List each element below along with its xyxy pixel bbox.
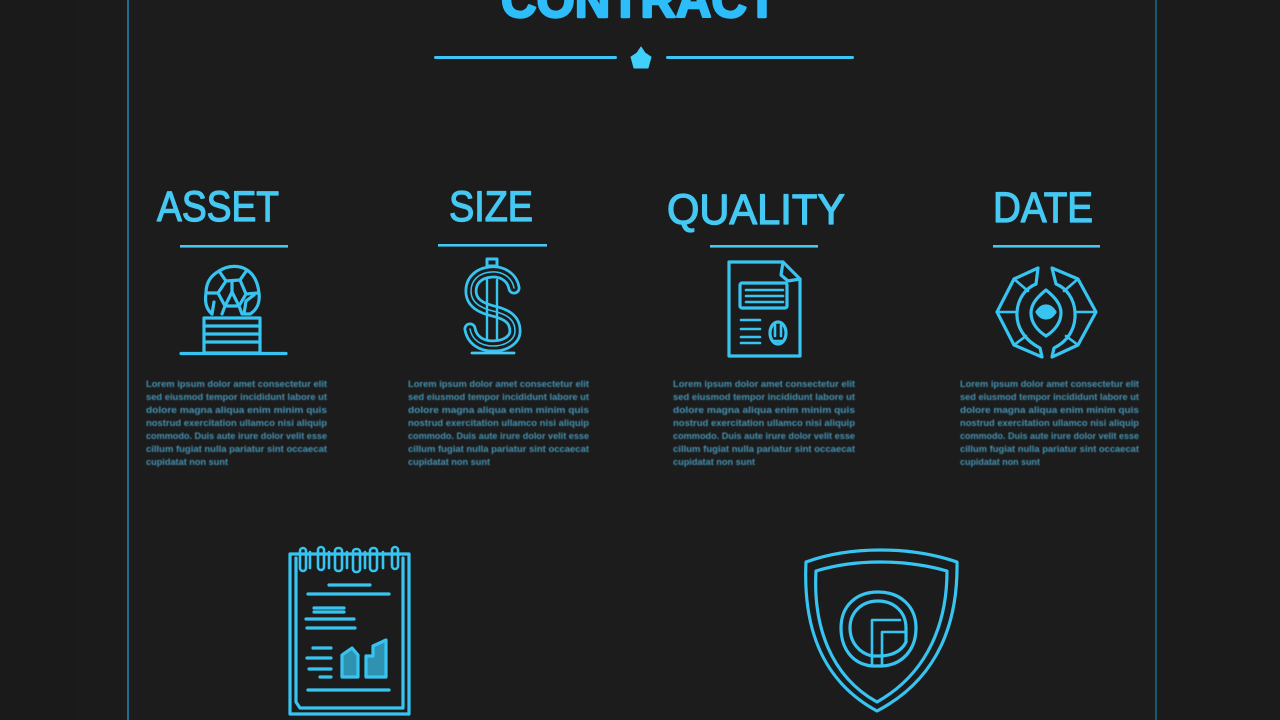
body text: size: sed eiusmod tempor incididunt labore ut — [408, 392, 589, 402]
body text: date: cupidatat non sunt — [960, 457, 1040, 467]
body text: quality: dolore magna aliqua enim minim quis — [673, 405, 855, 415]
body text: asset — [146, 379, 328, 467]
heading: size: SIZE — [449, 183, 533, 231]
icon: dollar sign — [470, 259, 515, 353]
body text: asset: sed eiusmod tempor incididunt labore ut — [146, 392, 327, 402]
body text: quality: cillum fugiat nulla pariatur sint occaecat — [673, 444, 855, 454]
icon: shield with emblem — [806, 550, 957, 711]
body text: quality: Lorem ipsum dolor amet consectetur elit — [673, 379, 855, 389]
body text: date — [960, 379, 1140, 467]
panel: asset — [146, 183, 328, 467]
icon: date cycle emblem — [997, 268, 1096, 357]
body text: quality — [673, 379, 856, 467]
body text: quality: nostrud exercitation ullamco nisi aliquip — [673, 418, 856, 428]
panel: date — [960, 184, 1140, 467]
body text: size: nostrud exercitation ullamco nisi aliquip — [408, 418, 590, 428]
body text: asset: dolore magna aliqua enim minim quis — [146, 405, 327, 415]
body text: quality: sed eiusmod tempor incididunt labore ut — [673, 392, 855, 402]
body text: size: dolore magna aliqua enim minim quis — [408, 405, 589, 415]
body text: date: nostrud exercitation ullamco nisi aliquip — [960, 418, 1140, 428]
body text: date: Lorem ipsum dolor amet consectetur elit — [960, 379, 1139, 389]
body text: size: cillum fugiat nulla pariatur sint occaecat — [408, 444, 589, 454]
icon: asset plant on stacked coins — [181, 266, 286, 354]
icon: notebook with report charts — [290, 547, 409, 714]
body text: quality: cupidatat non sunt — [673, 457, 755, 467]
heading: quality: QUALITY — [667, 186, 845, 234]
heading: date: DATE — [993, 184, 1093, 232]
panel: size — [438, 183, 547, 353]
body text: date: commodo. Duis aute irure dolor velit esse — [960, 431, 1139, 441]
body text: asset: nostrud exercitation ullamco nisi aliquip — [146, 418, 328, 428]
body text: size: commodo. Duis aute irure dolor velit esse — [408, 431, 589, 441]
body text: quality: commodo. Duis aute irure dolor velit esse — [673, 431, 855, 441]
body text: asset: cupidatat non sunt — [146, 457, 228, 467]
panel: quality — [667, 186, 856, 467]
body text: asset: cillum fugiat nulla pariatur sint occaecat — [146, 444, 327, 454]
icon: quality document — [729, 262, 800, 356]
body text: asset: commodo. Duis aute irure dolor velit esse — [146, 431, 327, 441]
title divider with star — [434, 47, 854, 68]
body text: date: sed eiusmod tempor incididunt labore ut — [960, 392, 1139, 402]
body text: asset: Lorem ipsum dolor amet consectetur elit — [146, 379, 327, 389]
body text: size: Lorem ipsum dolor amet consectetur elit — [408, 379, 589, 389]
body text: size — [408, 379, 590, 467]
body text: date: dolore magna aliqua enim minim quis — [960, 405, 1139, 415]
heading: asset: ASSET — [157, 183, 279, 231]
body text: date: cillum fugiat nulla pariatur sint occaecat — [960, 444, 1139, 454]
body text: size: cupidatat non sunt — [408, 457, 490, 467]
